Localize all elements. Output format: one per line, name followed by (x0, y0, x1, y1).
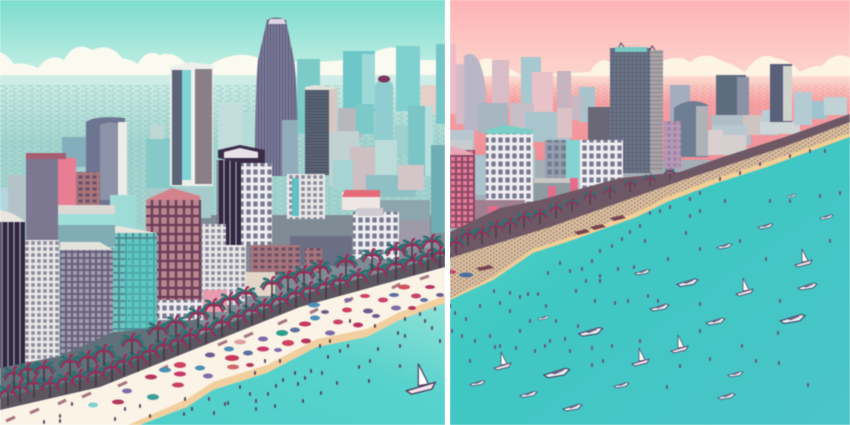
right crowded beach (450, 122, 850, 300)
right beach mats (448, 215, 626, 278)
left sun loungers (6, 276, 429, 421)
left rear skyscrapers (0, 44, 445, 210)
left teal grid hotel (87, 226, 157, 331)
panel: right beach scene (447, 0, 850, 425)
right low shops (475, 178, 579, 225)
right grey grid hotel (486, 125, 533, 203)
left foot-of-buildings shade (0, 318, 200, 408)
left beach umbrellas (88, 284, 444, 408)
right boats (470, 194, 833, 411)
left hazy city grid (0, 75, 445, 415)
right hazy city (450, 76, 850, 260)
right clouds (480, 55, 850, 76)
left twin tower (170, 62, 213, 186)
left clouds (0, 47, 445, 75)
left dark striped hotel (0, 210, 25, 370)
left flat teal podium (58, 205, 115, 248)
left palm shade band (0, 255, 445, 410)
right swimmers (450, 150, 840, 388)
right pink apartment block (450, 146, 475, 228)
left pink grid hotel (146, 188, 203, 320)
left low-rise teal white block (287, 174, 325, 219)
left sea (140, 303, 445, 425)
right main tower (610, 43, 663, 173)
left sailboat (406, 364, 435, 394)
right sky (450, 0, 850, 76)
right palm band (450, 114, 850, 260)
left palm row (0, 235, 451, 406)
right rear skyline (450, 44, 847, 160)
left beach sand (0, 265, 445, 425)
left sky (0, 0, 445, 75)
left dark and white hotel (217, 145, 272, 246)
left low-rise backdrop (157, 215, 445, 345)
central divider (445, 0, 450, 425)
left low-rise cluster (202, 190, 430, 312)
left mid towers (8, 117, 211, 240)
left distant teal tower (431, 145, 445, 233)
right sea (450, 137, 850, 425)
left light grid hotel (25, 240, 59, 368)
right pink tower and mid blocks (450, 121, 681, 195)
left dark block (305, 85, 337, 175)
right teal white apartments (545, 140, 623, 196)
panel: left beach scene (0, 0, 445, 415)
left grey grid hotel (60, 242, 113, 355)
left tapered tower (255, 18, 298, 176)
left swimmers and beachgoers (44, 308, 440, 423)
